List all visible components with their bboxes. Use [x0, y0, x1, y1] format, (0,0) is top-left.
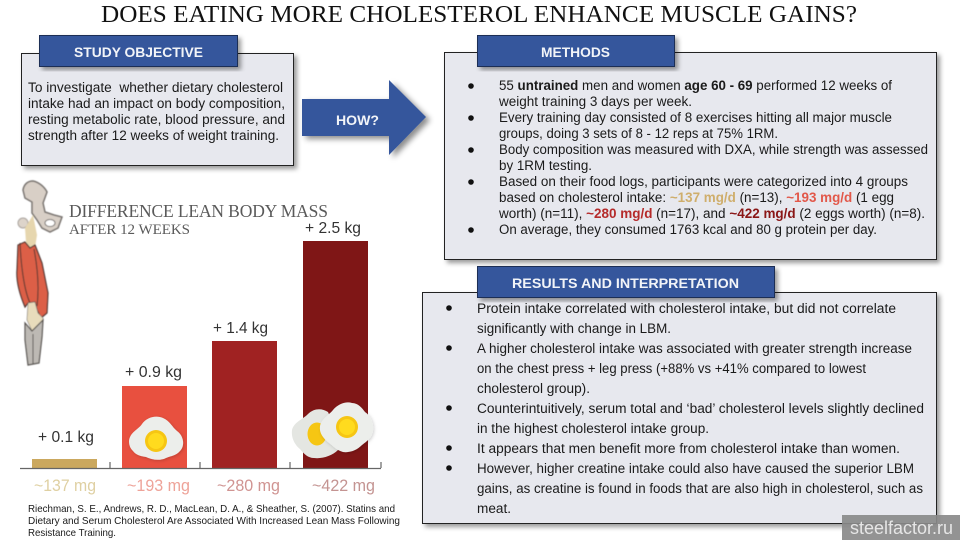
citation: Resistance Training. [28, 527, 116, 539]
bar: 422 mg [303, 241, 368, 468]
chart title: AFTER 12 WEEKS [69, 222, 190, 238]
category label: 137 mg: ~137 mg [34, 476, 96, 495]
icon: two fried eggs [292, 402, 373, 458]
text: results list: gains, as creatine is found in foods that are also high in cholesterol, such as [477, 481, 923, 496]
text: results list: Protein intake correlated with cholesterol intake, but did not correlate [477, 301, 896, 316]
category label: 280 mg: ~280 mg [217, 476, 280, 495]
chart: difference lean body mass [20, 201, 381, 495]
heading: study objective [40, 36, 238, 66]
text: results list: cholesterol group). [477, 381, 590, 396]
watermark: steelfactor.ru [850, 518, 953, 538]
citation: Dietary and Serum Cholesterol Are Associated With Increased Lean Mass Following [28, 515, 400, 527]
category label: 422 mg: ~422 mg [312, 476, 375, 495]
bar: 280 mg [212, 341, 277, 468]
text: methods list: based on cholesterol intake: ~137 mg/d (n=13), ~193 mg/d (1 egg [499, 190, 894, 205]
text: results list: meat. [477, 501, 511, 516]
citation [28, 503, 400, 539]
text: objective body: resting metabolic rate, blood pressure, and [28, 112, 285, 127]
heading: methods [478, 36, 674, 66]
chart title [69, 201, 328, 238]
text: objective body: intake had an impact on body composition, [28, 96, 285, 111]
value label: +1.4 kg: + 1.4 kg [213, 320, 268, 337]
text: objective body: To investigate whether dietary cholesterol [28, 80, 283, 95]
text: methods list: weight training 3 days per week. [498, 94, 692, 109]
value label: +2.5 kg: + 2.5 kg [305, 220, 361, 237]
value label: +0.1 kg: + 0.1 kg [38, 429, 94, 446]
text: results list: However, higher creatine intake could also have caused the superior LBM [477, 461, 914, 476]
text: objective body [28, 80, 285, 143]
text: methods list: worth) (n=11), ~280 mg/d (n=17), and ~422 mg/d (2 eggs worth) (n=8). [498, 206, 925, 221]
text: methods list: 55 untrained men and women age 60 - 69 performed 12 weeks of [499, 78, 892, 93]
watermark [842, 515, 960, 540]
text: results list: A higher cholesterol intake was associated with greater strength increase [477, 341, 912, 356]
category label: 193 mg: ~193 mg [127, 476, 190, 495]
bar: 193 mg [122, 386, 187, 468]
icon: leg muscle illustration [17, 181, 62, 365]
bar: 137 mg [32, 459, 97, 468]
panel: methods [444, 36, 936, 260]
heading: results: RESULTS AND INTERPRETATION [512, 276, 739, 291]
text: results list: in the highest cholesterol intake group. [477, 421, 709, 436]
panel: study objective [22, 36, 294, 166]
text: results list: Counterintuitively, serum total and ‘bad’ cholesterol levels slightly declined [477, 401, 924, 416]
title: DOES EATING MORE CHOLESTEROL ENHANCE MUSCLE GAINS? [101, 1, 857, 28]
text: methods list: Based on their food logs, participants were categorized into 4 groups [499, 174, 908, 189]
value label: +0.9 kg: + 0.9 kg [125, 364, 182, 381]
heading: methods: METHODS [541, 45, 610, 60]
text: methods list: Every training day consisted of 8 exercises hitting all major muscle [499, 110, 892, 125]
text: results list: on the chest press + leg press (+88% vs +41% compared to lowest [477, 361, 866, 376]
chart title: DIFFERENCE LEAN BODY MASS [69, 201, 328, 221]
text: methods list: by 1RM testing. [499, 158, 592, 173]
text: methods list: On average, they consumed 1763 kcal and 80 g protein per day. [499, 222, 877, 237]
arrow: how: HOW? [336, 113, 379, 128]
panel: results and interpretation [422, 266, 936, 524]
text: results list [446, 301, 924, 516]
text: methods list: Body composition was measured with DXA, while strength was assessed [499, 142, 928, 157]
text: results list: significantly with change in LBM. [477, 321, 671, 336]
icon: one fried egg [129, 417, 183, 460]
text: methods list: groups, doing 3 sets of 8 - 12 reps at 75% 1RM. [499, 126, 778, 141]
text: results list: It appears that men benefit more from cholesterol intake than women. [477, 441, 900, 456]
heading: study objective: STUDY OBJECTIVE [74, 45, 203, 60]
text: objective body: strength after 12 weeks of weight training. [28, 128, 279, 143]
heading: results [478, 266, 774, 298]
citation: Riechman, S. E., Andrews, R. D., MacLean, D. A., & Sheather, S. (2007). Statins and [28, 503, 395, 515]
arrow: how [302, 80, 426, 155]
text: methods list [468, 78, 928, 237]
